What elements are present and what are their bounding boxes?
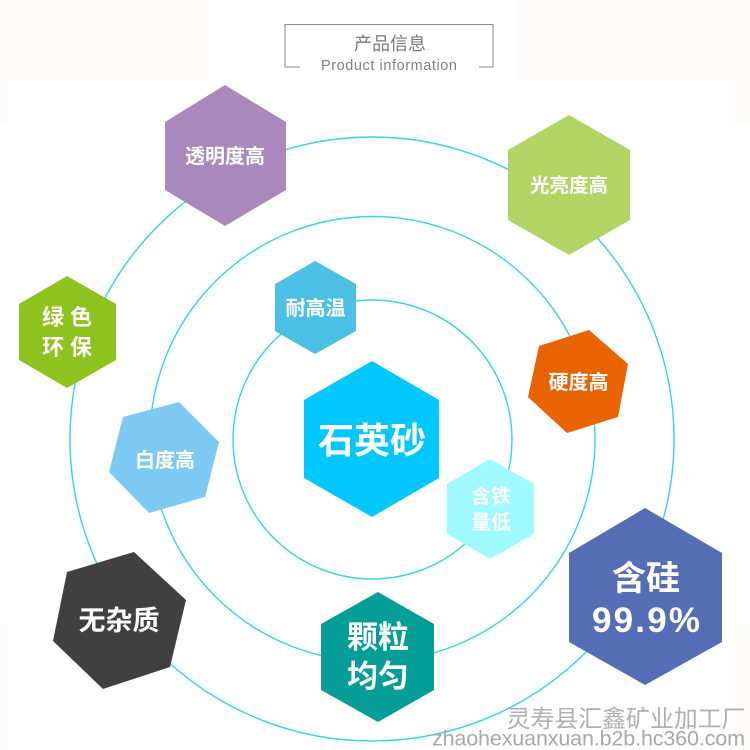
- hexagon: green and eco-friendly: [19, 276, 116, 388]
- hexagon: uniform grain: 均匀: [347, 659, 409, 694]
- hexagon: transparency: [165, 85, 286, 226]
- header: product information: Product information: [321, 58, 457, 74]
- hexagon: uniform grain: 颗粒: [347, 620, 409, 655]
- hexagon: brightness: [508, 115, 630, 255]
- concentric rings: [70, 137, 674, 741]
- hexagon: hardness: [528, 330, 628, 433]
- hexagon: quartz sand centre: [304, 361, 439, 517]
- hexagon: no impurities: [53, 552, 186, 689]
- hexagon: quartz sand centre: 石英砂: [318, 420, 426, 461]
- hexagon: whiteness: 白度高: [135, 448, 195, 472]
- hexagon: low iron: 含铁: [471, 484, 511, 508]
- hexagon: silicon 99.9%: [569, 508, 722, 685]
- hexagon: no impurities: 无杂质: [78, 606, 160, 636]
- watermark: zhaohexuanxuan.b2b.hc360.com: [432, 726, 745, 750]
- header: product information: [285, 24, 493, 74]
- hexagon: uniform grain: [321, 592, 434, 722]
- hexagon: green and eco-friendly: 环 保: [42, 335, 92, 360]
- hexagon: green and eco-friendly: 绿 色: [42, 305, 92, 330]
- hexagon: silicon 99.9%: 含硅: [612, 560, 680, 598]
- watermark: [432, 706, 746, 750]
- watermark: 灵寿县汇鑫矿业加工厂: [506, 706, 746, 733]
- hexagon: brightness: 光亮度高: [530, 174, 608, 197]
- hexagon: low iron: 量低: [471, 511, 511, 534]
- hexagon: silicon 99.9%: 99.9%: [592, 601, 700, 640]
- hexagon: transparency: 透明度高: [185, 144, 265, 168]
- hexagon: low iron: [447, 459, 534, 559]
- hexagon: heat resistance: 耐高温: [286, 296, 346, 320]
- header: product information: 产品信息: [354, 34, 426, 54]
- hexagon: heat resistance: [275, 261, 356, 354]
- hexagon: whiteness: [109, 402, 219, 513]
- hexagon: hardness: 硬度高: [548, 370, 608, 394]
